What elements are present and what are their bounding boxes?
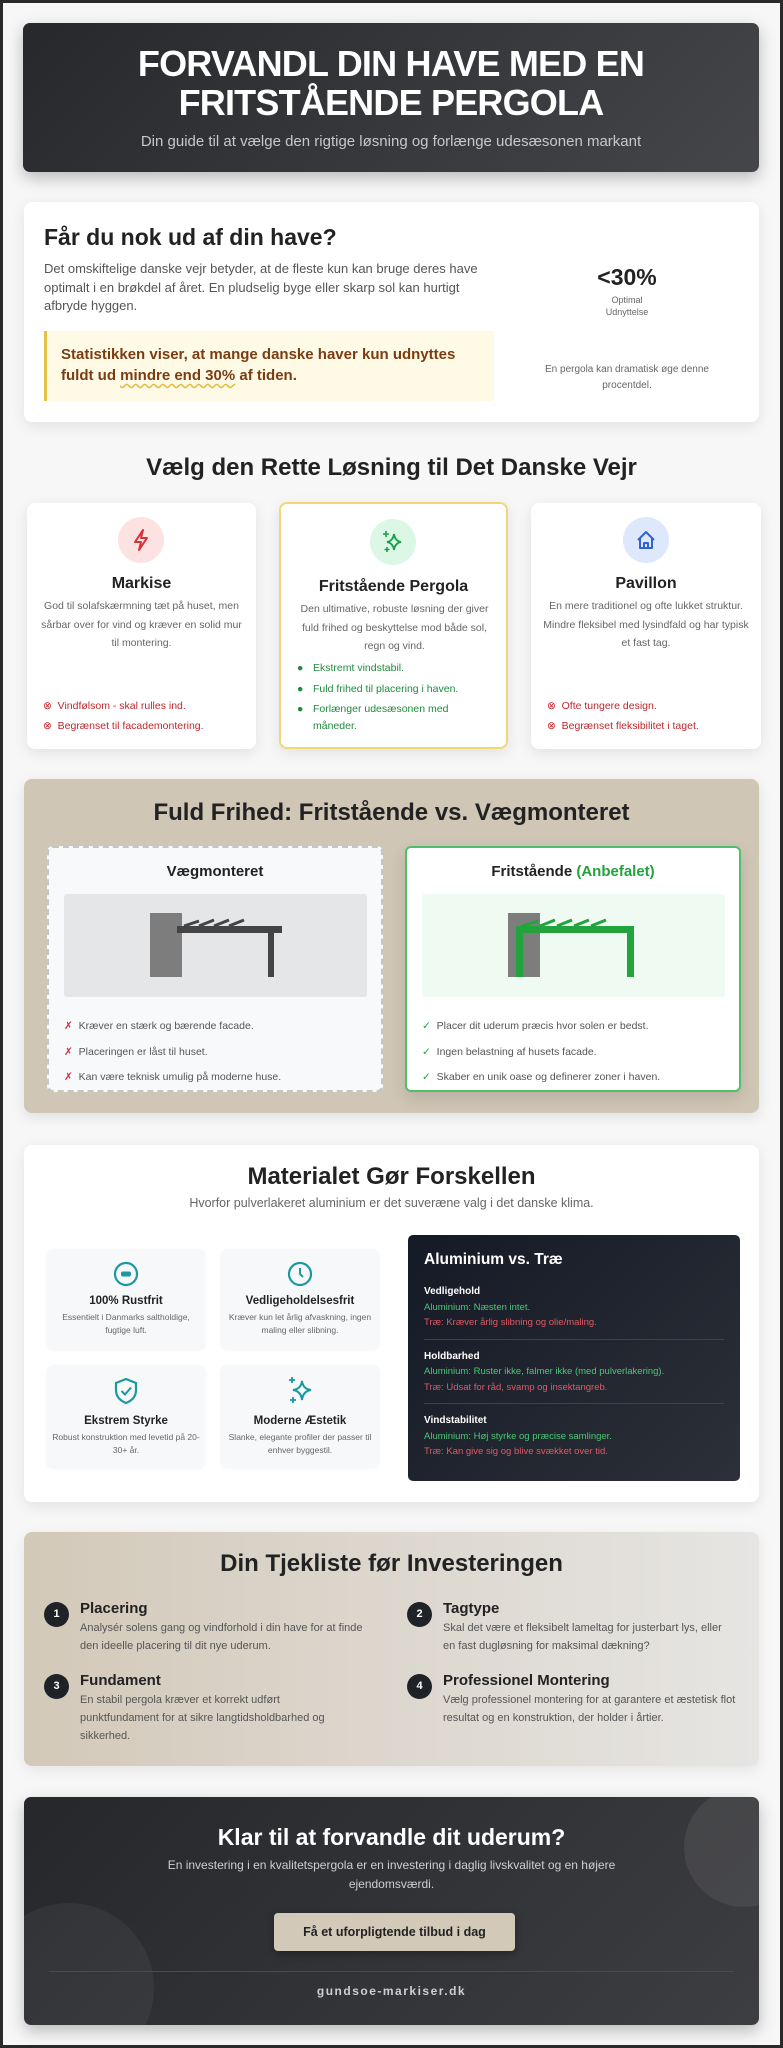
comparison: maintenance xyxy=(424,1284,724,1340)
stat: <30% xyxy=(597,264,657,317)
comparison: wind stability: Aluminium: Høj styrke og præcise samlinger. xyxy=(424,1430,612,1442)
name: Markise xyxy=(112,575,171,592)
heading: Klar til at forvandle dit uderum? xyxy=(218,1824,565,1850)
icon: shield xyxy=(114,1378,138,1404)
comparison: durability: Træ: Udsat for råd, svamp og insektangreb. xyxy=(424,1382,607,1392)
item 1 xyxy=(44,1600,363,1652)
item 4: 4 xyxy=(416,1680,423,1692)
icon: rust-free xyxy=(114,1262,138,1286)
cons list: ⊗ Begrænset til facademontering. xyxy=(43,720,204,732)
subheading: Vægmonteret xyxy=(167,863,263,880)
comparison: maintenance: Træ: Kræver årlig slibning og olie/maling. xyxy=(424,1317,597,1328)
icon: sparkle xyxy=(289,1377,312,1403)
cons list: ✗ Kræver en stærk og bærende facade. xyxy=(64,1020,254,1032)
cons list xyxy=(547,700,699,732)
header banner xyxy=(23,23,759,172)
title: FRITSTÅENDE PERGOLA xyxy=(179,82,603,123)
item 3: Fundament xyxy=(80,1672,161,1689)
item 1: 1 xyxy=(53,1608,60,1620)
cons list xyxy=(43,700,204,732)
comparison: durability xyxy=(424,1348,724,1404)
item 1: Placering xyxy=(80,1600,148,1617)
pros list: ✓ Skaber en unik oase og definerer zoner i haven. xyxy=(422,1071,660,1083)
name: Fritstående Pergola xyxy=(319,578,468,595)
icon: lightning xyxy=(118,517,164,563)
panel: intro question xyxy=(24,202,759,422)
heading: Materialet Gør Forskellen xyxy=(247,1163,536,1190)
item 2: Tagtype xyxy=(443,1600,499,1617)
cons list: ✗ Placeringen er låst til huset. xyxy=(64,1046,208,1058)
pros list: Ekstremt vindstabil. xyxy=(313,662,404,674)
title xyxy=(138,43,644,123)
item 3: 3 xyxy=(53,1680,60,1692)
title: FORVANDL DIN HAVE MED EN xyxy=(138,43,644,84)
cons list: ✗ Kan være teknisk umulig på moderne huse. xyxy=(64,1071,281,1083)
domain: gundsoe-markiser.dk xyxy=(317,1984,466,1998)
name: Pavillon xyxy=(615,575,677,592)
item 4: Vælg professionel montering for at garantere et æstetisk flot resultat og en konstruktion, der holder i årtier. xyxy=(443,1694,735,1724)
pros list: Forlænger udesæsonen med måneder. xyxy=(313,703,448,732)
panel: aluminium vs wood xyxy=(408,1235,740,1481)
cons list: ⊗ Ofte tungere design. xyxy=(547,700,657,712)
button: Få et uforpligtende tilbud i dag xyxy=(303,1925,486,1939)
icon: sparkle xyxy=(370,519,416,565)
panel: call to action xyxy=(24,1797,759,2025)
callout: statistic: Statistikken viser, at mange danske haver kun udnyttes fuldt ud mindre end 30% af tiden. xyxy=(61,346,455,384)
cons list xyxy=(64,1020,281,1083)
stat: <30%: <30% xyxy=(597,264,657,290)
comparison: wind stability: Vindstabilitet xyxy=(424,1415,487,1426)
item 4 xyxy=(407,1672,736,1724)
stat: <30%: Udnyttelse xyxy=(606,307,648,317)
feature: maintenance free: Kræver kun let årlig afvaskning, ingen maling eller slibning. xyxy=(229,1312,371,1335)
comparison: wind stability xyxy=(424,1415,612,1457)
text: En investering i en kvalitetspergola er en investering i daglig livskvalitet og en højere ejendomsværdi. xyxy=(168,1858,615,1891)
callout: statistic xyxy=(44,331,494,401)
description: God til solafskærmning tæt på huset, men sårbar over for vind og kræver en solid mur til montering. xyxy=(41,600,242,649)
panel: Fritstående Pergola xyxy=(279,502,508,749)
item 4: Professionel Montering xyxy=(443,1672,610,1689)
item 2 xyxy=(407,1600,722,1652)
sub-panel: wall mounted xyxy=(47,846,383,1092)
button xyxy=(274,1913,515,1951)
feature: strength: Robust konstruktion med levetid på 20-30+ år. xyxy=(52,1432,200,1455)
feature: aesthetics xyxy=(221,1365,379,1467)
pros list xyxy=(297,662,458,732)
panel: Pavillon xyxy=(531,503,761,749)
feature: strength xyxy=(47,1365,205,1467)
intro text: Det omskiftelige danske vejr betyder, at de fleste kun kan bruge deres have optimalt i en brøkdel af året. En pludselig byge eller skarp sol kan hurtigt afbryde hyggen. xyxy=(44,261,478,313)
heading: Fuld Frihed: Fritstående vs. Vægmonteret xyxy=(153,799,630,826)
heading: Din Tjekliste før Investeringen xyxy=(220,1550,563,1577)
panel: materials xyxy=(24,1145,759,1502)
heading: Får du nok ud af din have? xyxy=(44,224,337,250)
feature: aesthetics: Moderne Æstetik xyxy=(254,1415,346,1427)
item 3 xyxy=(44,1672,325,1742)
panel heading: Aluminium vs. Træ xyxy=(424,1251,563,1268)
pros list: ● xyxy=(297,662,303,674)
stat: <30%: Optimal xyxy=(611,295,642,305)
item 3: En stabil pergola kræver et korrekt udført punktfundament for at sikre langtidsholdbarhed og sikkerhed. xyxy=(80,1694,325,1742)
description: En mere traditionel og ofte lukket struktur. Mindre fleksibel med lysindfald og har typisk et fast tag. xyxy=(543,600,749,649)
subtitle: Din guide til at vælge den rigtige løsning og forlænge udesæsonen markant xyxy=(141,133,641,150)
panel: checklist xyxy=(24,1532,759,1766)
comparison: durability: Aluminium: Ruster ikke, falmer ikke (med pulverlakering). xyxy=(424,1366,664,1377)
diagram: wall mounted pergola xyxy=(64,894,367,997)
subheading: Hvorfor pulverlakeret aluminium er det suveræne valg i det danske klima. xyxy=(189,1196,594,1210)
panel: Markise xyxy=(27,503,256,749)
feature: strength: Ekstrem Styrke xyxy=(84,1415,168,1427)
feature: rustfrit xyxy=(47,1249,205,1349)
pros list: ✓ Placer dit uderum præcis hvor solen er bedst. xyxy=(422,1020,648,1032)
feature: maintenance free xyxy=(221,1249,379,1349)
pros list: Fuld frihed til placering i haven. xyxy=(313,683,458,695)
feature: rustfrit: Essentielt i Danmarks saltholdige, fugtige luft. xyxy=(62,1312,190,1335)
comparison: durability: Holdbarhed xyxy=(424,1350,480,1362)
pros list: ● xyxy=(297,683,303,695)
feature: rustfrit: 100% Rustfrit xyxy=(89,1295,163,1307)
sub-panel: freestanding xyxy=(405,846,741,1092)
pros list: ● xyxy=(297,703,303,715)
comparison: wind stability: Træ: Kan give sig og blive svækket over tid. xyxy=(424,1446,608,1457)
section heading: solutions: Vælg den Rette Løsning til Det Danske Vejr xyxy=(146,454,637,481)
panel: freestanding vs wall mounted xyxy=(24,779,759,1113)
feature: aesthetics: Slanke, elegante profiler der passer til enhver byggestil. xyxy=(229,1432,371,1455)
cons list: ⊗ Begrænset fleksibilitet i taget. xyxy=(547,720,699,732)
item 2: Skal det være et fleksibelt lameltag for justerbart lys, eller en fast dugløsning for maksimal dækning? xyxy=(443,1622,722,1652)
pros list: ✓ Ingen belastning af husets facade. xyxy=(422,1046,597,1058)
icon: clock xyxy=(288,1262,312,1286)
icon: house xyxy=(623,517,669,563)
item 2: 2 xyxy=(416,1608,423,1620)
subheading: Fritstående (Anbefalet) xyxy=(491,863,655,880)
comparison: maintenance: Aluminium: Næsten intet. xyxy=(424,1302,530,1312)
pros list xyxy=(422,1020,660,1083)
description: Den ultimative, robuste løsning der giver fuld frihed og beskyttelse mod både sol, regn og vind. xyxy=(301,603,488,652)
comparison: maintenance: Vedligehold xyxy=(424,1286,480,1297)
diagram: freestanding pergola xyxy=(422,894,725,997)
feature: maintenance free: Vedligeholdelsesfrit xyxy=(246,1295,354,1307)
stat note: En pergola kan dramatisk øge denne procentdel. xyxy=(545,364,709,391)
item 1: Analysér solens gang og vindforhold i din have for at finde den ideelle placering til dit nye uderum. xyxy=(80,1622,363,1652)
cons list: ⊗ Vindfølsom - skal rulles ind. xyxy=(43,700,186,712)
